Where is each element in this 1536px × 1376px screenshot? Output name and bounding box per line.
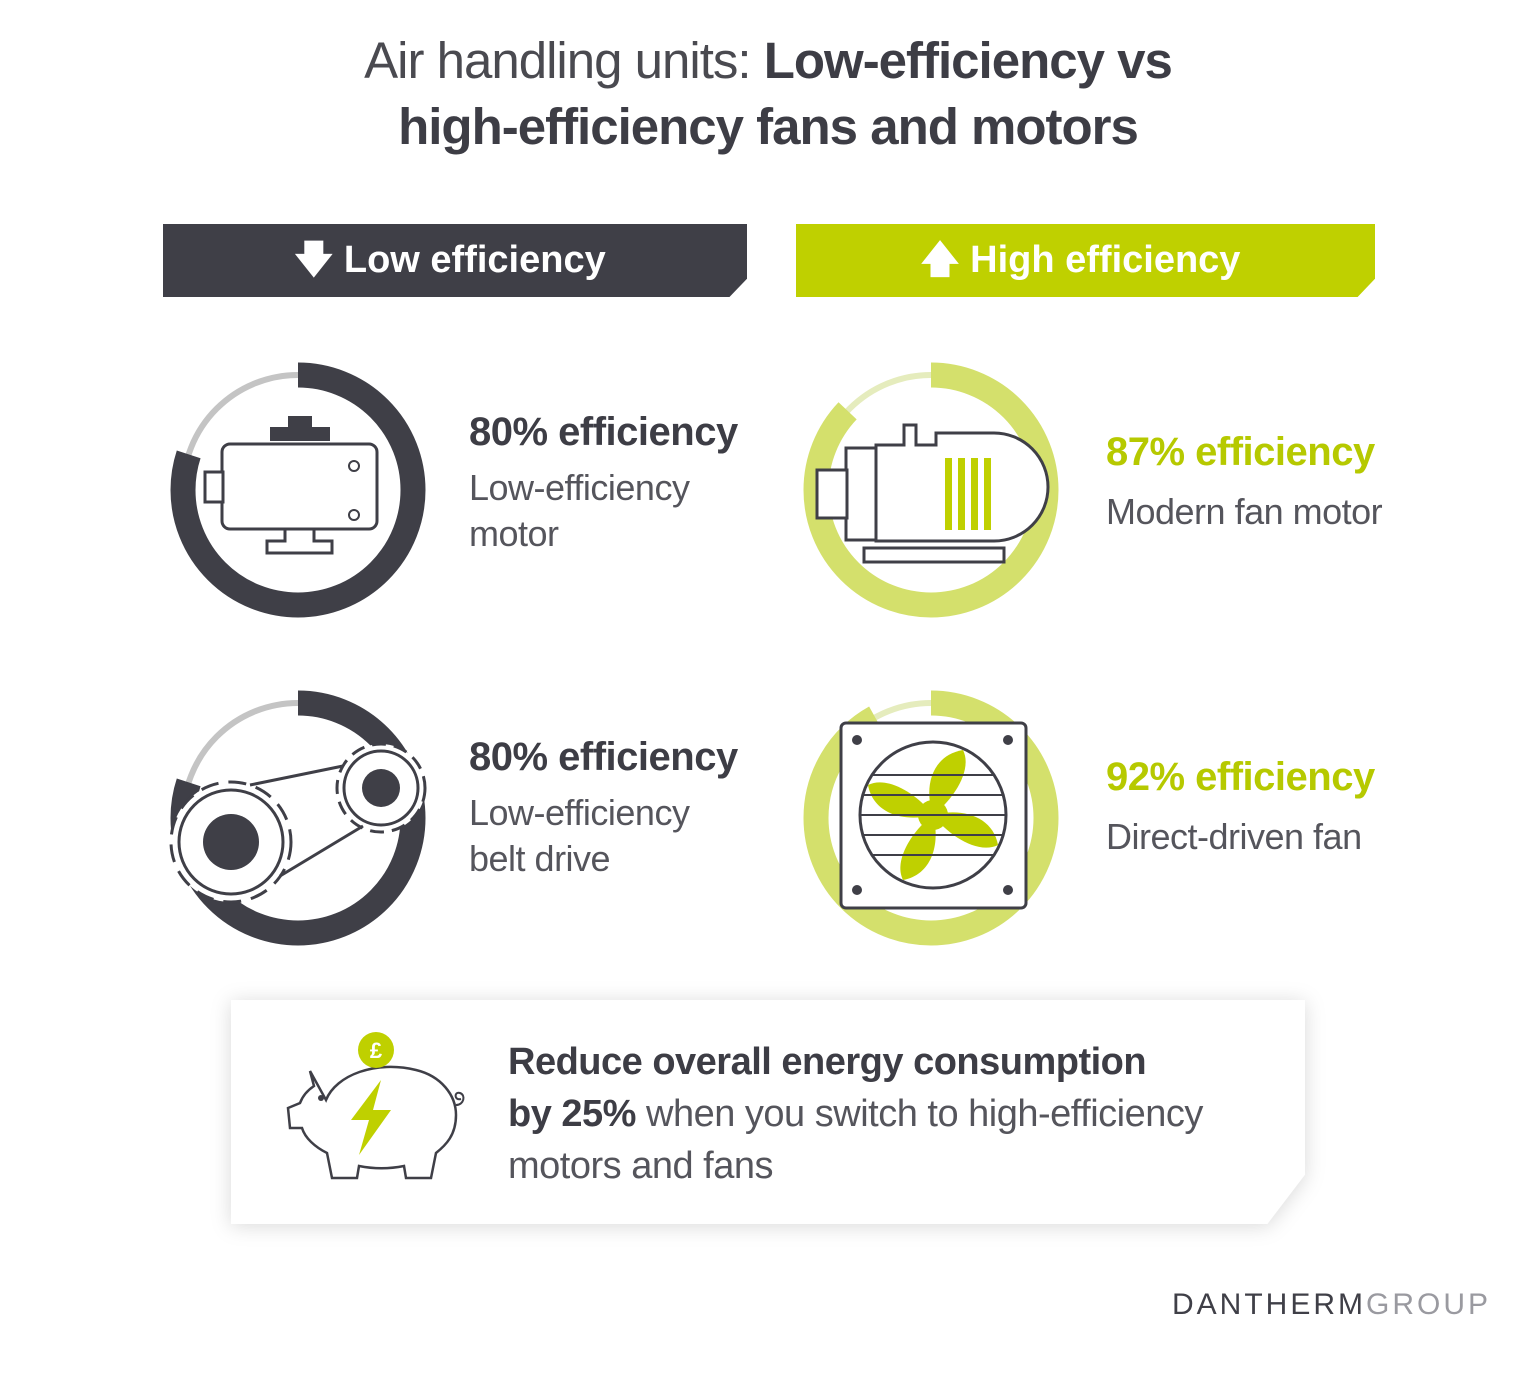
callout text: by 25% when you switch to high-efficiency [508,1093,1203,1135]
text: high fan [1106,755,1375,857]
logo: DANTHERMGROUP [1172,1288,1491,1321]
text: low belt [469,735,738,879]
text: high motor [1106,430,1382,532]
callout text: Reduce overall energy consumption [508,1041,1146,1083]
text: high fan: 92% efficiency [1106,755,1375,799]
text: low motor: 80% efficiency [469,410,738,454]
callout text: motors and fans [508,1145,773,1187]
icon: belt drive gauge [171,703,425,933]
text: high fan: Direct-driven fan [1106,816,1362,857]
header: high efficiency [796,224,1375,297]
header: low efficiency [163,224,747,297]
title: Air handling units: Low-efficiency vs [364,32,1172,89]
icon: piggy bank: £ [370,1038,383,1063]
header: high efficiency: 🡅 High efficiency [921,239,1240,281]
text: high motor: 87% efficiency [1106,430,1375,474]
text: low motor: Low-efficiency [469,467,689,508]
icon: direct-driven fan gauge [816,703,1046,933]
header: low efficiency: 🡇 Low efficiency [294,239,606,281]
title [364,32,1172,155]
title: high-efficiency fans and motors [398,98,1138,155]
text: low motor: motor [469,513,559,554]
callout box [224,994,1312,1234]
callout text [508,1041,1204,1187]
text: low belt: Low-efficiency [469,792,689,833]
text: low belt: 80% efficiency [469,735,738,779]
text: high motor: Modern fan motor [1106,491,1382,532]
text: low belt: belt drive [469,838,610,879]
icon: piggy bank [286,1032,464,1180]
text: low motor [469,410,738,554]
icon: motor gauge [183,375,413,605]
icon: modern fan motor gauge [816,375,1048,605]
